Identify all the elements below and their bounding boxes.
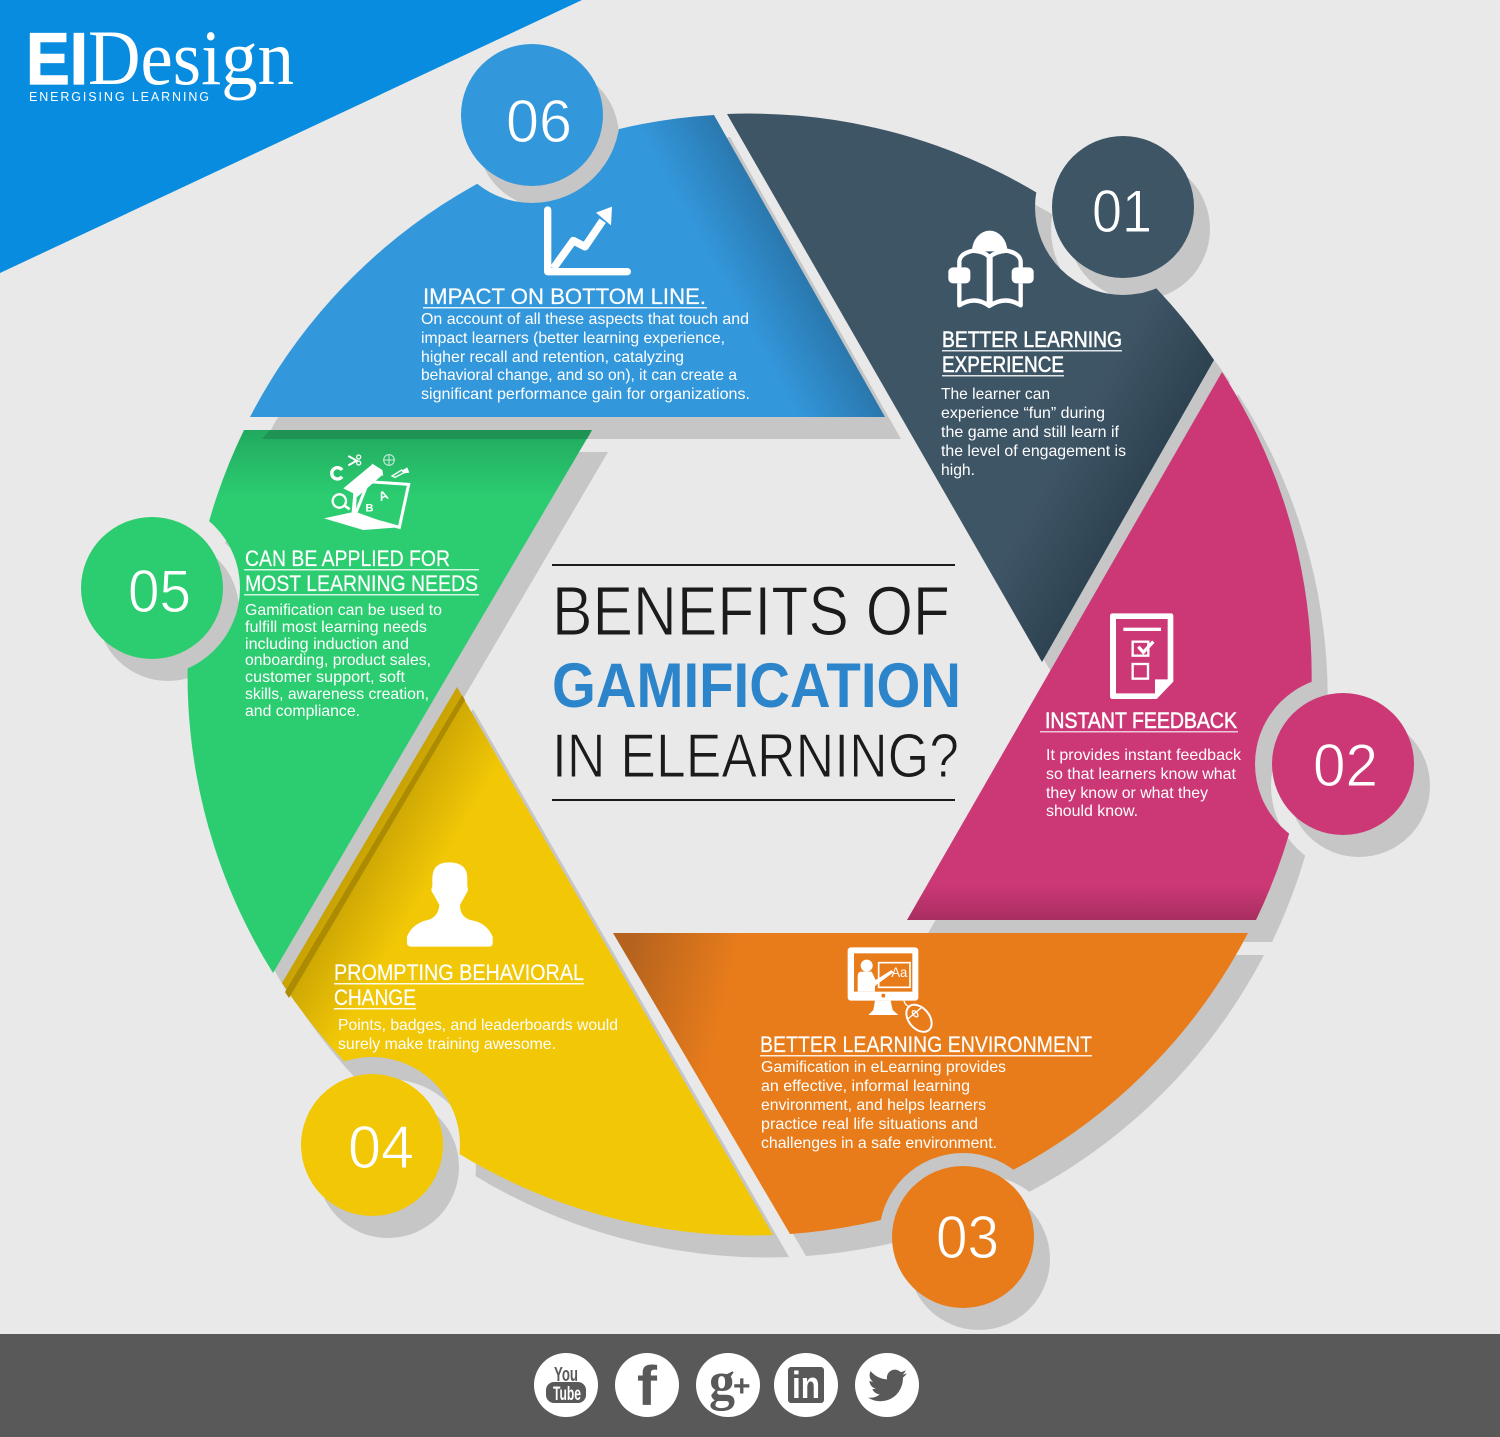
badge 04 [301, 1074, 443, 1216]
panel: 03 better learning environment [613, 933, 1248, 1234]
body text [941, 386, 1126, 479]
logo: EIDesign: EI [26, 19, 88, 100]
drop shadows of ring and badges [97, 66, 1430, 1330]
heading [244, 546, 479, 596]
panel: 02 instant feedback [907, 372, 1312, 920]
badge 03 [892, 1166, 1034, 1308]
badge 03: 03 [936, 1204, 999, 1271]
heading: IMPACT ON BOTTOM LINE. [423, 284, 706, 309]
body text: On account of all these aspects that touch and [421, 311, 749, 328]
icon: youtube: You [554, 1364, 578, 1386]
body text: they know or what they [1046, 785, 1208, 802]
icon: google plus [696, 1351, 760, 1417]
badge 01 [1052, 136, 1194, 278]
center title: GAMIFICATION [552, 651, 961, 721]
body text: and compliance. [245, 703, 360, 720]
icon: person reading book [948, 231, 1034, 306]
icon: graduation cap and laptop [324, 455, 409, 530]
heading [334, 960, 584, 1010]
panel: 05 can be applied for most learning needs [188, 430, 592, 973]
logo: EIDesign: ENERGISING LEARNING [29, 90, 209, 104]
body text: The learner can [941, 386, 1050, 403]
icon: graduation cap and laptop: B [365, 502, 374, 514]
body text: onboarding, product sales, [245, 652, 431, 669]
body text: experience “fun” during [941, 405, 1105, 422]
body text: Points, badges, and leaderboards would [338, 1017, 618, 1034]
body text: environment, and helps learners [761, 1097, 986, 1114]
heading: BETTER LEARNING ENVIRONMENT [760, 1032, 1092, 1057]
icon: graduation cap and laptop: A [377, 488, 390, 504]
icon: linkedin [774, 1353, 838, 1417]
body text: Gamification can be used to [245, 602, 442, 619]
icon: youtube: Tube [553, 1384, 581, 1405]
body text: It provides instant feedback [1046, 747, 1242, 764]
body text: the level of engagement is [941, 443, 1126, 460]
body text: including induction and [245, 636, 409, 653]
badge 01: 01 [1092, 178, 1152, 245]
body text: impact learners (better learning experience, [421, 330, 725, 347]
icon: checklist [1110, 613, 1173, 699]
center title: IN ELEARNING? [552, 722, 959, 791]
body text: customer support, soft [245, 669, 406, 686]
body text: skills, awareness creation, [245, 686, 429, 703]
body text: the game and still learn if [941, 424, 1120, 441]
body text: Gamification in eLearning provides [761, 1059, 1006, 1076]
footer bar [0, 1334, 1500, 1437]
badge 06 [461, 44, 603, 186]
heading: CAN BE APPLIED FOR [245, 546, 450, 571]
icon: person silhouette [407, 862, 493, 947]
heading: BETTER LEARNING [942, 327, 1122, 352]
corner banner [0, 0, 582, 273]
icon: twitter [855, 1353, 919, 1417]
icon: training monitor and mouse: Aa [891, 964, 908, 980]
body text: should know. [1046, 803, 1138, 820]
heading: INSTANT FEEDBACK [1045, 708, 1237, 733]
heading: EXPERIENCE [942, 352, 1064, 377]
body text: fulfill most learning needs [245, 619, 427, 636]
logo: EIDesign: Design [88, 14, 294, 101]
panel: 06 impact on bottom line [250, 115, 885, 417]
badge 04: 04 [348, 1114, 414, 1181]
body text: significant performance gain for organizations. [421, 386, 750, 403]
badge 05: 05 [128, 558, 191, 625]
body text [245, 602, 442, 720]
badge 02 [1272, 693, 1414, 835]
body text: higher recall and retention, catalyzing [421, 349, 684, 366]
body text: behavioral change, and so on), it can create a [421, 367, 737, 384]
body text: high. [941, 462, 975, 479]
panel: 04 prompting behavioral change [282, 687, 773, 1235]
center title [552, 564, 961, 801]
icon: rising chart [548, 207, 627, 272]
body text: so that learners know what [1046, 766, 1237, 783]
body text [421, 311, 750, 403]
heading: PROMPTING BEHAVIORAL [334, 960, 584, 985]
body text [1046, 747, 1242, 820]
center title: BENEFITS OF [552, 572, 950, 650]
icon: linkedin: in [792, 1365, 820, 1407]
panel: 01 better learning experience [727, 114, 1214, 662]
icon: facebook: f [637, 1354, 657, 1417]
icon: facebook [615, 1353, 679, 1417]
badge 06: 06 [506, 88, 572, 155]
body text [761, 1059, 1006, 1152]
badge 02: 02 [1313, 732, 1378, 799]
body text [338, 1017, 618, 1053]
body text: practice real life situations and [761, 1116, 978, 1133]
badge 05 [81, 517, 223, 659]
icon: training monitor and mouse [848, 947, 937, 1037]
body text: surely make training awesome. [338, 1036, 556, 1053]
body text: an effective, informal learning [761, 1078, 970, 1095]
icon: youtube [534, 1353, 598, 1417]
icon: google plus: + [733, 1370, 751, 1403]
heading: CHANGE [334, 985, 416, 1010]
icon: google plus: g [709, 1351, 735, 1411]
heading: MOST LEARNING NEEDS [245, 571, 478, 596]
heading [942, 327, 1122, 377]
body text: challenges in a safe environment. [761, 1135, 997, 1152]
